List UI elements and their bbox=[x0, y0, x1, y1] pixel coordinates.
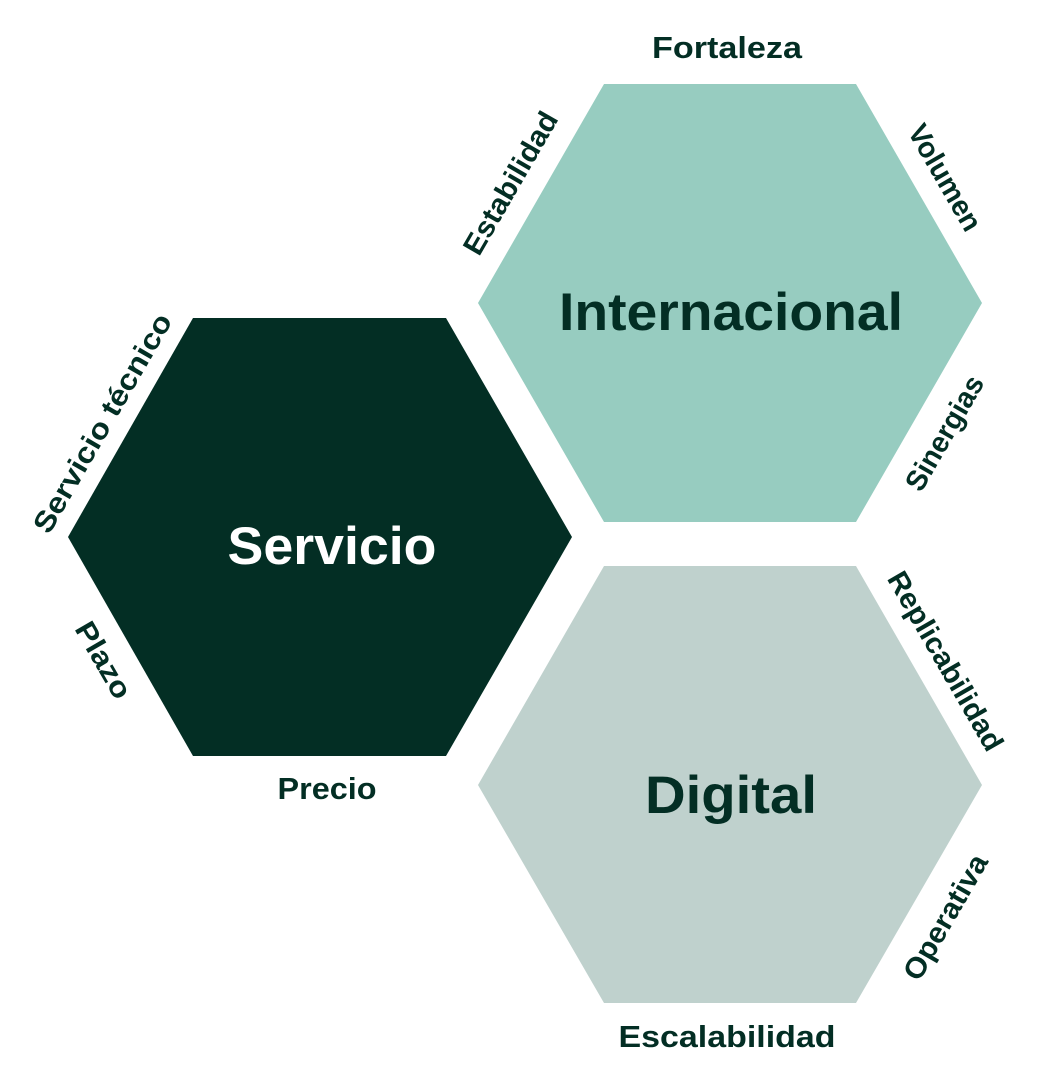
panel: Internacional bbox=[478, 84, 982, 522]
label: Sinergias: Sinergias bbox=[899, 370, 991, 497]
label: Operativa: Operativa bbox=[897, 848, 996, 986]
label: Fortaleza: Fortaleza bbox=[652, 30, 803, 65]
panel: Servicio bbox=[68, 318, 572, 756]
heading: Servicio: Servicio bbox=[228, 517, 436, 576]
label: Precio: Precio bbox=[278, 771, 376, 806]
panel: Digital bbox=[478, 566, 982, 1003]
heading: Digital: Digital bbox=[645, 766, 817, 825]
label: Servicio técnico: Servicio técnico bbox=[27, 308, 179, 539]
label: Replicabilidad: Replicabilidad bbox=[880, 566, 1009, 757]
label: Volumen: Volumen bbox=[901, 119, 988, 237]
label: Plazo: Plazo bbox=[68, 616, 138, 705]
label: Estabilidad: Estabilidad bbox=[457, 106, 565, 261]
heading: Internacional: Internacional bbox=[559, 283, 903, 342]
label: Escalabilidad: Escalabilidad bbox=[618, 1019, 836, 1054]
